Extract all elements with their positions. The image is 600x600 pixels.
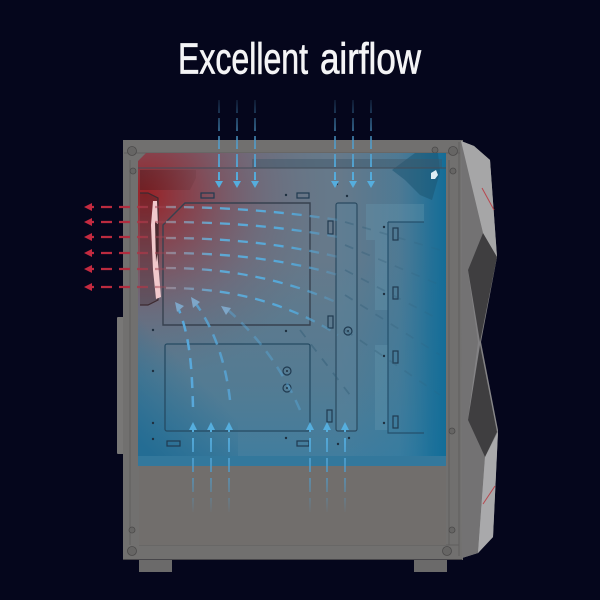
corner screws bbox=[128, 146, 458, 556]
airflow: internal blue streams bbox=[166, 207, 338, 335]
airflow: red exhaust arrows bbox=[84, 203, 166, 291]
fan bbox=[151, 201, 161, 299]
fan blade shadow bbox=[155, 222, 158, 262]
top vent strip bbox=[252, 159, 442, 168]
left side bracket bbox=[117, 317, 125, 454]
airflow: bottom intake arrows bbox=[189, 422, 349, 512]
title: Excellent bbox=[178, 34, 308, 84]
red accents bbox=[482, 188, 494, 210]
frame rails bbox=[123, 142, 462, 560]
airflow: faint continuation streams bbox=[300, 222, 440, 395]
drive bay bbox=[366, 204, 424, 430]
case feet bbox=[139, 558, 447, 572]
fan mount bbox=[140, 193, 158, 305]
small highlight bbox=[431, 170, 438, 179]
window interior bbox=[138, 153, 446, 466]
motherboard cut-out bbox=[163, 203, 310, 325]
airflow: top intake arrows bbox=[215, 100, 375, 188]
front panel bbox=[461, 141, 498, 558]
computer case bbox=[117, 140, 498, 572]
lower cut-out bbox=[165, 344, 310, 431]
case frame bbox=[123, 140, 463, 560]
cable slot bbox=[336, 203, 357, 431]
dark facets bbox=[468, 233, 497, 342]
lower shroud bbox=[139, 466, 446, 545]
airflow: internal arrowheads bbox=[175, 297, 231, 315]
dark cable area bbox=[392, 153, 440, 200]
top-left plate bbox=[140, 170, 196, 190]
tiny screws bbox=[152, 183, 385, 445]
window screws and slots bbox=[167, 193, 398, 446]
title: airflow bbox=[320, 34, 421, 84]
airflow: upward curved streams bbox=[179, 304, 300, 410]
